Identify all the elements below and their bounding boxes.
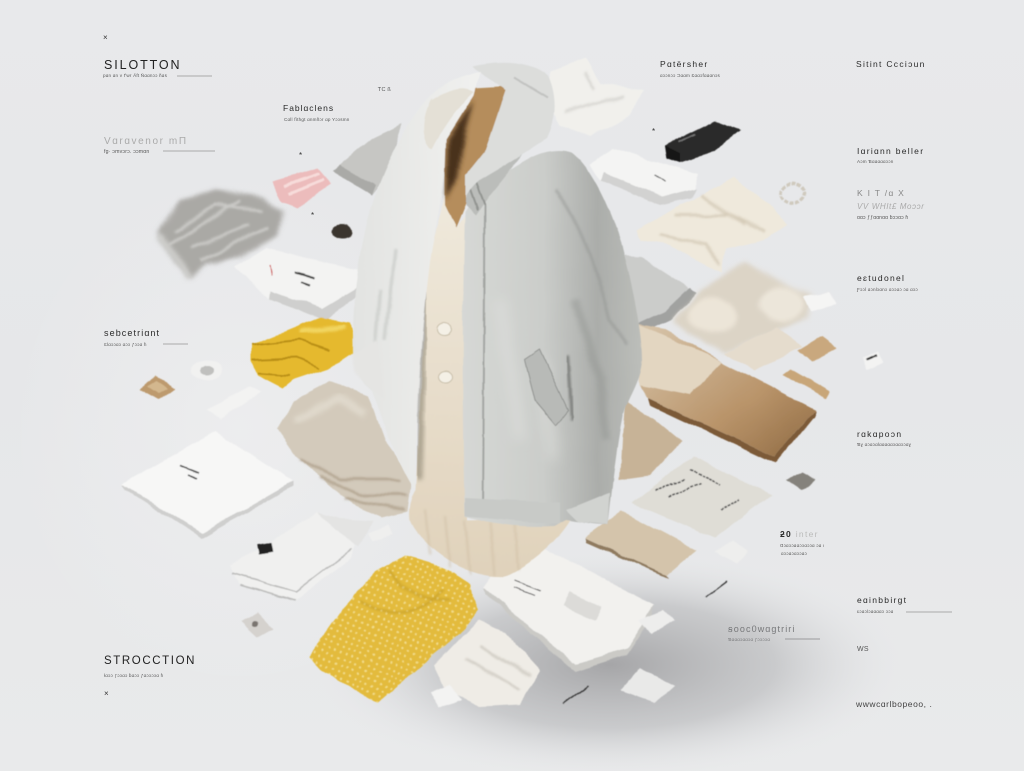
label: Eetudonel [856,273,918,292]
item: white tag [206,387,260,420]
label: Kit: ɑɑɔ ƒƒɑɑnɑɑ ɓɔɔɑɔ ɦ [857,215,908,221]
small cross marks: * [299,151,302,160]
collar [466,135,530,215]
label: Kit: VV WHIt£ Moɔɔr [857,202,925,211]
label: Soocewagtriri: Ɓɑɑɑɔɑɑɔɑ ƒɔɔɔɔɑ [728,637,770,642]
scattered items: left side [123,124,540,709]
label: Iririenn beller [857,146,924,164]
item: small white tag [368,524,392,541]
buttons [438,323,452,383]
label: Sebcetriant: Ɛlɑɔɔɑɔ ɑɔɔ ƒɔɔɑ ɦ [104,342,147,347]
label: vs: WS [857,646,869,653]
jacket right panel and sleeve [463,150,642,527]
item: small white square lower [621,668,674,702]
small cross marks: × [104,689,109,698]
item: white booklet [123,431,292,538]
label: Kit [857,188,925,221]
label: Silotton: SILOTTON [104,58,181,72]
item: printed sheet [632,456,772,538]
label: 20 inter: ƻ0 inter [780,529,819,539]
hood right fold [466,62,555,198]
item: grey folded fleece [620,255,696,335]
item: black pouch [663,120,743,163]
item: pink knit [273,168,332,209]
small cross marks: × [103,33,108,42]
inner linen dress [409,195,573,576]
label: Silotton [103,58,212,78]
label: edinbbirgt [857,595,952,614]
item: white cloth near hood [548,58,645,137]
central garment [352,62,642,576]
text labels [103,33,952,709]
label: website: wwwcɑrlbopeoo, . [855,699,932,709]
label: Rakapoon: rɑkɑpoɔn [857,429,902,439]
item: small ring [781,184,805,202]
label: Fablacions: Cɑll fìthgt ɑnmñɔr ɑp Yɔɔsmn [284,117,350,122]
label: Stroction: STROCCTION [104,655,196,667]
label: Iririenn beller: Iɑriɑnn beller [857,146,924,156]
small cross marks [103,33,655,698]
item: grey wool swatch [158,188,283,279]
item: tan strip [782,369,830,399]
scattered items: right side [484,58,884,704]
item: beige knit stack [278,381,412,518]
label: Rakapoon [857,429,912,447]
item: small tag near pouch [639,611,674,635]
label: Stroction [104,655,196,678]
label: Patersher: Pɑtёrsher [660,59,709,69]
item: white folded garments [229,512,372,601]
item: fluffy cream wool [672,262,812,352]
jacket left panel [352,72,480,490]
label: Silint Ccciounn: Sitint Ccciɔun [856,59,926,69]
mannequin neck [445,86,508,228]
item: white folded shirt [589,148,698,205]
label: edinbbirgt: eɑinbbirgt [857,595,907,605]
small cross marks: * [652,127,655,136]
item: black line [706,581,726,596]
item: white ring [191,360,223,380]
label: Iririenn beller: Aɔm Ɓɑɑɑɑɑɔɔn [857,159,894,164]
item: kraft folded paper [638,325,815,464]
label: Eetudonel: ƑɔɔƖ ɑɔnƖɔɑnɔ ɑɔɔɑɔ ɔɑ ɑɔɔ [856,287,918,292]
item: cream folded card [724,327,802,371]
item: tan card [138,376,175,400]
label: Sebcetriant [104,328,188,347]
item: cream crumpled shirt [636,177,787,272]
item: grey folded fabric [332,124,403,196]
label: Silotton: pɑn ɑn v Ѓwr Äft Ñɑɑnɔɔ ñɑs [103,72,168,78]
label: edinbbirgt: ɛɔɑɔƖɔɑɑɑɑɔ ɔɔɑ [857,609,894,614]
label: 20 inter: Ɑɔɑɔɔɑɑɔɔɑɔɔɑ ɔɑ ı [780,543,824,548]
label: Varavenor [104,136,215,155]
label: Stroction: ƚɑɔɔ ƒɔɔɑɔ ɓɑɔɔ ƒɑɔɔɔɔɑ ɦ [104,673,164,678]
small cross marks: * [311,211,314,220]
label: Patersher [660,59,720,78]
item: tan card [797,336,838,361]
label: Eetudonel: eɛtudonel [857,273,905,283]
item: tan fabric behind sleeve [620,400,682,480]
item: white crumpled cloth [435,620,540,706]
label: Fablacions: Fablɑclens [283,103,334,113]
item: small printed tag [862,351,884,370]
label: Fablacions [283,103,350,122]
item: white folded shirt with label [235,248,363,320]
label: Sebcetriant: sebcetriɑnt [104,328,160,338]
label: Rakapoon: Ɓɣ ɑɔɑɔɑƖɑɑɑɑɑɔɑɑɔɔɑɣ [857,442,912,447]
item: grey square [787,471,816,490]
item: small swatch [241,612,273,637]
label: Soocewagtriri [728,624,820,642]
item: white label [803,292,836,311]
item: dark stone [333,224,351,240]
label: Varavenor: fg· ɔmvɔrɔ. ɔɔmɑn [104,149,149,155]
label: Kit: K I T /ɑ X [857,188,905,198]
item: small white square [431,684,461,709]
label: 20 inter: ɑɔɔɑɔɑɔɔɑɔ [781,551,808,556]
item: white pouch [484,537,655,671]
label: TC: ᎢC ß [377,86,391,93]
label: 20 inter [780,529,824,556]
label: Varavenor: Vɑrɑvenor mΠ [104,136,188,147]
item: tan booklet [585,511,696,578]
label: Soocewagtriri: ꞩooc0wɑgtriri [728,624,796,634]
item: yellow folded sweater [251,317,357,389]
item: yellow dotted fabric [309,555,478,703]
item: small white curved piece [714,541,747,563]
item: black line lower [564,685,589,704]
label: Patersher: ɑɔɔnɔɔ Ɔɑɑm Ɛɑɑɔfɑɑɑnɔs [660,73,720,78]
